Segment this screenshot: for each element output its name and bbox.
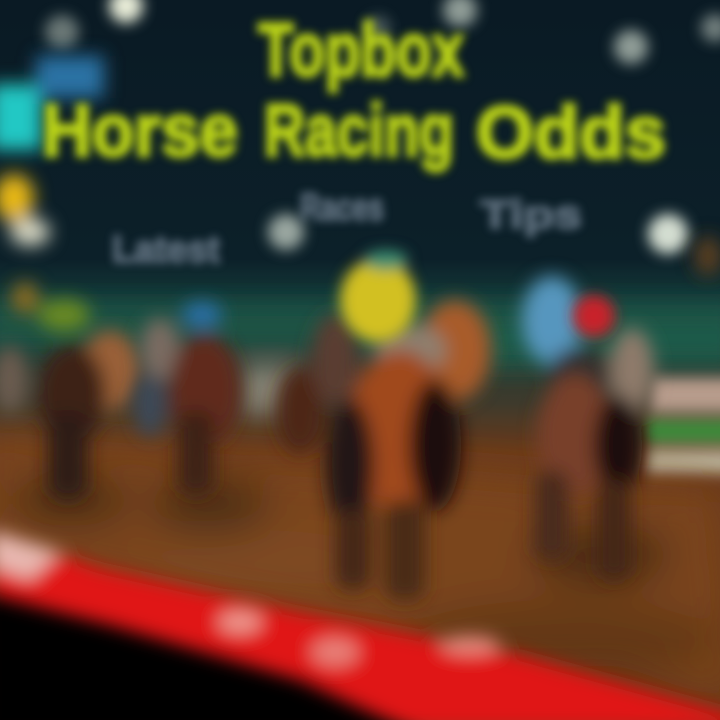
horse 3: centre [276, 300, 491, 600]
icon: yellow badge [0, 174, 720, 276]
horse 2 [134, 302, 241, 495]
horse 1 [0, 282, 140, 500]
title: Topbox [258, 8, 464, 93]
logo: teal block [0, 56, 104, 150]
title: Horse [42, 89, 238, 172]
small captions: Latest [112, 229, 220, 271]
title [42, 8, 666, 174]
infield: green rail band [0, 305, 720, 415]
foreground shadow [0, 592, 430, 720]
title: Racing [264, 89, 454, 172]
dirt track [0, 430, 720, 700]
small captions: Tips [480, 193, 582, 237]
title: Odds [476, 91, 666, 174]
jockey: yellow silks [340, 250, 416, 342]
small captions [112, 187, 582, 271]
small captions: Races [300, 187, 384, 229]
right-side fence [645, 378, 720, 474]
stadium lights [45, 0, 720, 254]
red rail [0, 530, 720, 720]
jockey: red cap [573, 295, 615, 337]
horse 4: right [522, 276, 654, 580]
